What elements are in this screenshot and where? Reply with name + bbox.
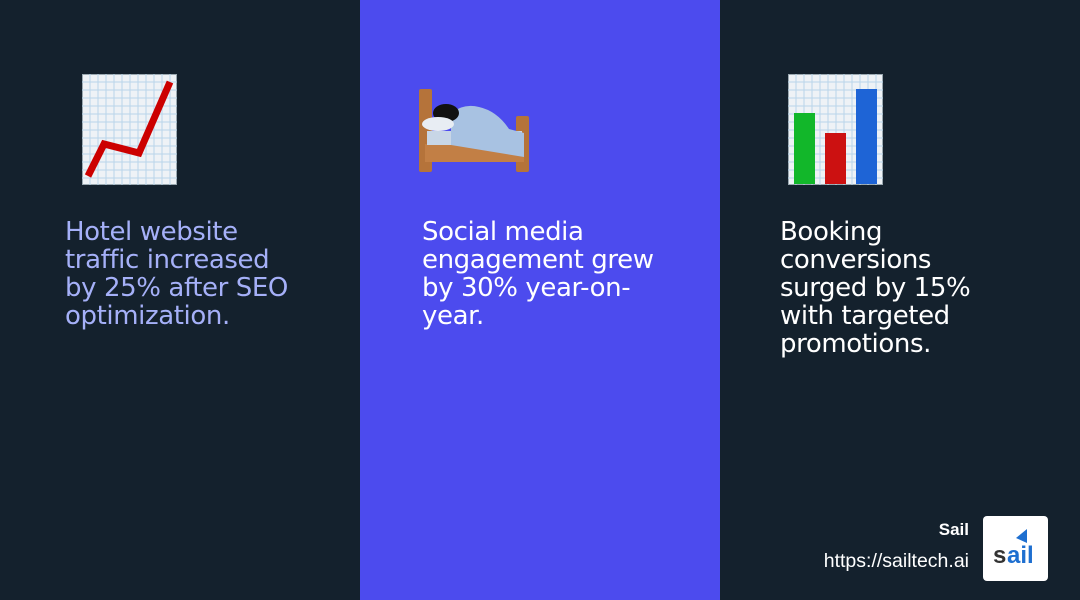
icon: rising chart xyxy=(82,74,177,185)
text: brand name: Sail xyxy=(939,520,969,539)
text: conversions stat: promotions. xyxy=(780,329,931,359)
text: social stat: Social media xyxy=(422,217,584,247)
text: conversions stat: with targeted xyxy=(780,301,950,331)
text: traffic stat: by 25% after SEO xyxy=(65,273,288,303)
panel: traffic xyxy=(0,0,360,600)
icon: logo xyxy=(983,516,1048,581)
text: social stat xyxy=(422,217,654,331)
icon: logo: s xyxy=(993,542,1006,569)
text: social stat: engagement grew xyxy=(422,245,654,275)
icon: logo: ail xyxy=(1007,542,1034,569)
text: social stat: by 30% year-on- xyxy=(422,273,630,303)
text: social stat: year. xyxy=(422,301,484,331)
text: conversions stat xyxy=(780,217,970,359)
text: url: https://sailtech.ai xyxy=(824,550,969,572)
panel: social xyxy=(360,0,720,600)
text: traffic stat: Hotel website xyxy=(65,217,238,247)
footer: brand xyxy=(824,516,1048,581)
text: conversions stat: Booking xyxy=(780,217,882,247)
text: traffic stat: traffic increased xyxy=(65,245,269,275)
text: conversions stat: surged by 15% xyxy=(780,273,970,303)
icon: bar chart xyxy=(788,74,883,185)
text: traffic stat: optimization. xyxy=(65,301,230,331)
panel: conversions xyxy=(720,0,1080,600)
text: traffic stat xyxy=(65,217,288,331)
icon: bed xyxy=(419,89,529,172)
text: conversions stat: conversions xyxy=(780,245,931,275)
